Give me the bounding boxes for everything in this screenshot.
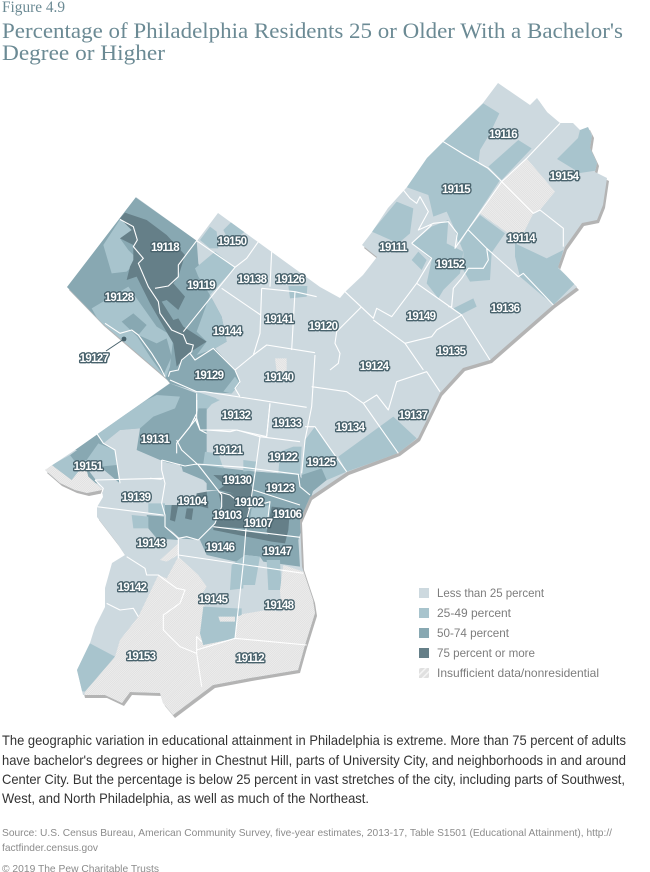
ZIP code labels: 19129 xyxy=(195,370,224,382)
ZIP code labels: 19112 xyxy=(236,653,264,665)
ZIP code labels: 19120 xyxy=(309,321,338,333)
river wards xyxy=(196,392,416,491)
ZIP code labels: 19135 xyxy=(437,346,467,358)
ZIP code labels: 19133 xyxy=(273,418,302,430)
ZIP code labels: 19102 xyxy=(235,497,264,509)
title: Percentage of Philadelphia Residents 25 or Older With a Bachelor's xyxy=(2,18,623,43)
ZIP code labels: 19151 xyxy=(74,461,104,473)
ZIP code labels: 19132 xyxy=(222,410,251,422)
ZIP code labels: 19142 xyxy=(118,582,147,594)
ZIP code labels: 19128 xyxy=(105,292,135,304)
ZIP code labels: 19150 xyxy=(218,236,247,248)
legend xyxy=(419,586,599,680)
19154 higher-attainment tract xyxy=(557,127,600,173)
ZIP code labels: 19139 xyxy=(122,492,151,504)
ZIP code labels: 19152 xyxy=(436,259,465,271)
ZIP code labels: 19103 xyxy=(213,510,242,522)
source note xyxy=(2,827,612,854)
ZIP code labels: 19153 xyxy=(127,651,156,663)
ZIP code labels: 19111 xyxy=(379,242,408,254)
leader line for 19127 xyxy=(106,337,126,351)
legend: insufficient data: Insufficient data/nonresidential xyxy=(437,666,599,680)
legend: 25-49 percent: 25-49 percent xyxy=(437,606,512,620)
ZIP code labels: 19148 xyxy=(265,600,295,612)
source note: factfinder.census.gov xyxy=(2,842,99,854)
ZIP code labels: 19131 xyxy=(141,434,171,446)
southwest neighborhoods xyxy=(73,460,327,720)
legend: 50-74 percent: 50-74 percent xyxy=(437,626,510,640)
ZIP code labels: 19106 xyxy=(273,509,302,521)
northwest neighborhoods xyxy=(67,197,307,450)
shaded neighborhoods xyxy=(40,80,620,720)
ZIP code labels: 19138 xyxy=(238,274,268,286)
ZIP code labels xyxy=(74,129,580,665)
ZIP code labels: 19104 xyxy=(178,496,208,508)
source note: Source: U.S. Census Bureau, American Community Survey, five-year estimates, 2013-17, Table S1501 (Educational Attainment), http:// xyxy=(2,827,612,839)
ZIP code labels: 19114 xyxy=(507,233,536,245)
19131 and 19151 neighborhoods xyxy=(40,395,207,500)
ZIP code labels: 19141 xyxy=(265,314,295,326)
legend: 75 percent or more: 75 percent or more xyxy=(437,646,535,660)
body paragraph xyxy=(2,732,626,806)
map drop shadow xyxy=(47,86,609,718)
ZIP code labels: 19144 xyxy=(213,326,243,338)
title: Degree or Higher xyxy=(2,40,166,65)
ZIP code labels: 19123 xyxy=(266,483,295,495)
choropleth map xyxy=(40,80,620,720)
ZIP code labels: 19115 xyxy=(442,184,471,196)
ZIP code labels: 19145 xyxy=(199,594,229,606)
ZIP code labels: 19146 xyxy=(206,542,235,554)
neighborhood boundary lines xyxy=(95,123,563,687)
ZIP code labels: 19122 xyxy=(269,452,298,464)
northeast neighborhoods xyxy=(372,103,575,315)
ZIP code labels: 19143 xyxy=(137,538,166,550)
ZIP code labels: 19126 xyxy=(276,274,305,286)
ZIP code labels: 19119 xyxy=(187,280,215,292)
ZIP code labels: 19124 xyxy=(360,361,390,373)
ZIP code labels: 19136 xyxy=(491,303,520,315)
legend: less than 25 percent: Less than 25 percent xyxy=(437,586,545,600)
ZIP code labels: 19127 xyxy=(80,353,109,365)
ZIP code labels: 19107 xyxy=(244,518,273,530)
center city neighborhoods xyxy=(170,460,290,557)
ZIP code labels: 19149 xyxy=(407,311,436,323)
ZIP code labels: 19116 xyxy=(489,129,517,141)
ZIP code labels: 19140 xyxy=(265,372,294,384)
ZIP code labels: 19118 xyxy=(151,242,180,254)
ZIP code labels: 19125 xyxy=(307,457,337,469)
ZIP code labels: 19134 xyxy=(336,422,366,434)
title xyxy=(2,18,623,65)
ZIP code labels: 19147 xyxy=(263,546,292,558)
ZIP code labels: 19130 xyxy=(223,475,252,487)
body paragraph: West, and North Philadelphia, as well as much of the Northeast. xyxy=(2,790,369,806)
ZIP code labels: 19154 xyxy=(550,171,580,183)
ZIP code labels: 19121 xyxy=(214,445,244,457)
ZIP code labels: 19137 xyxy=(399,410,428,422)
